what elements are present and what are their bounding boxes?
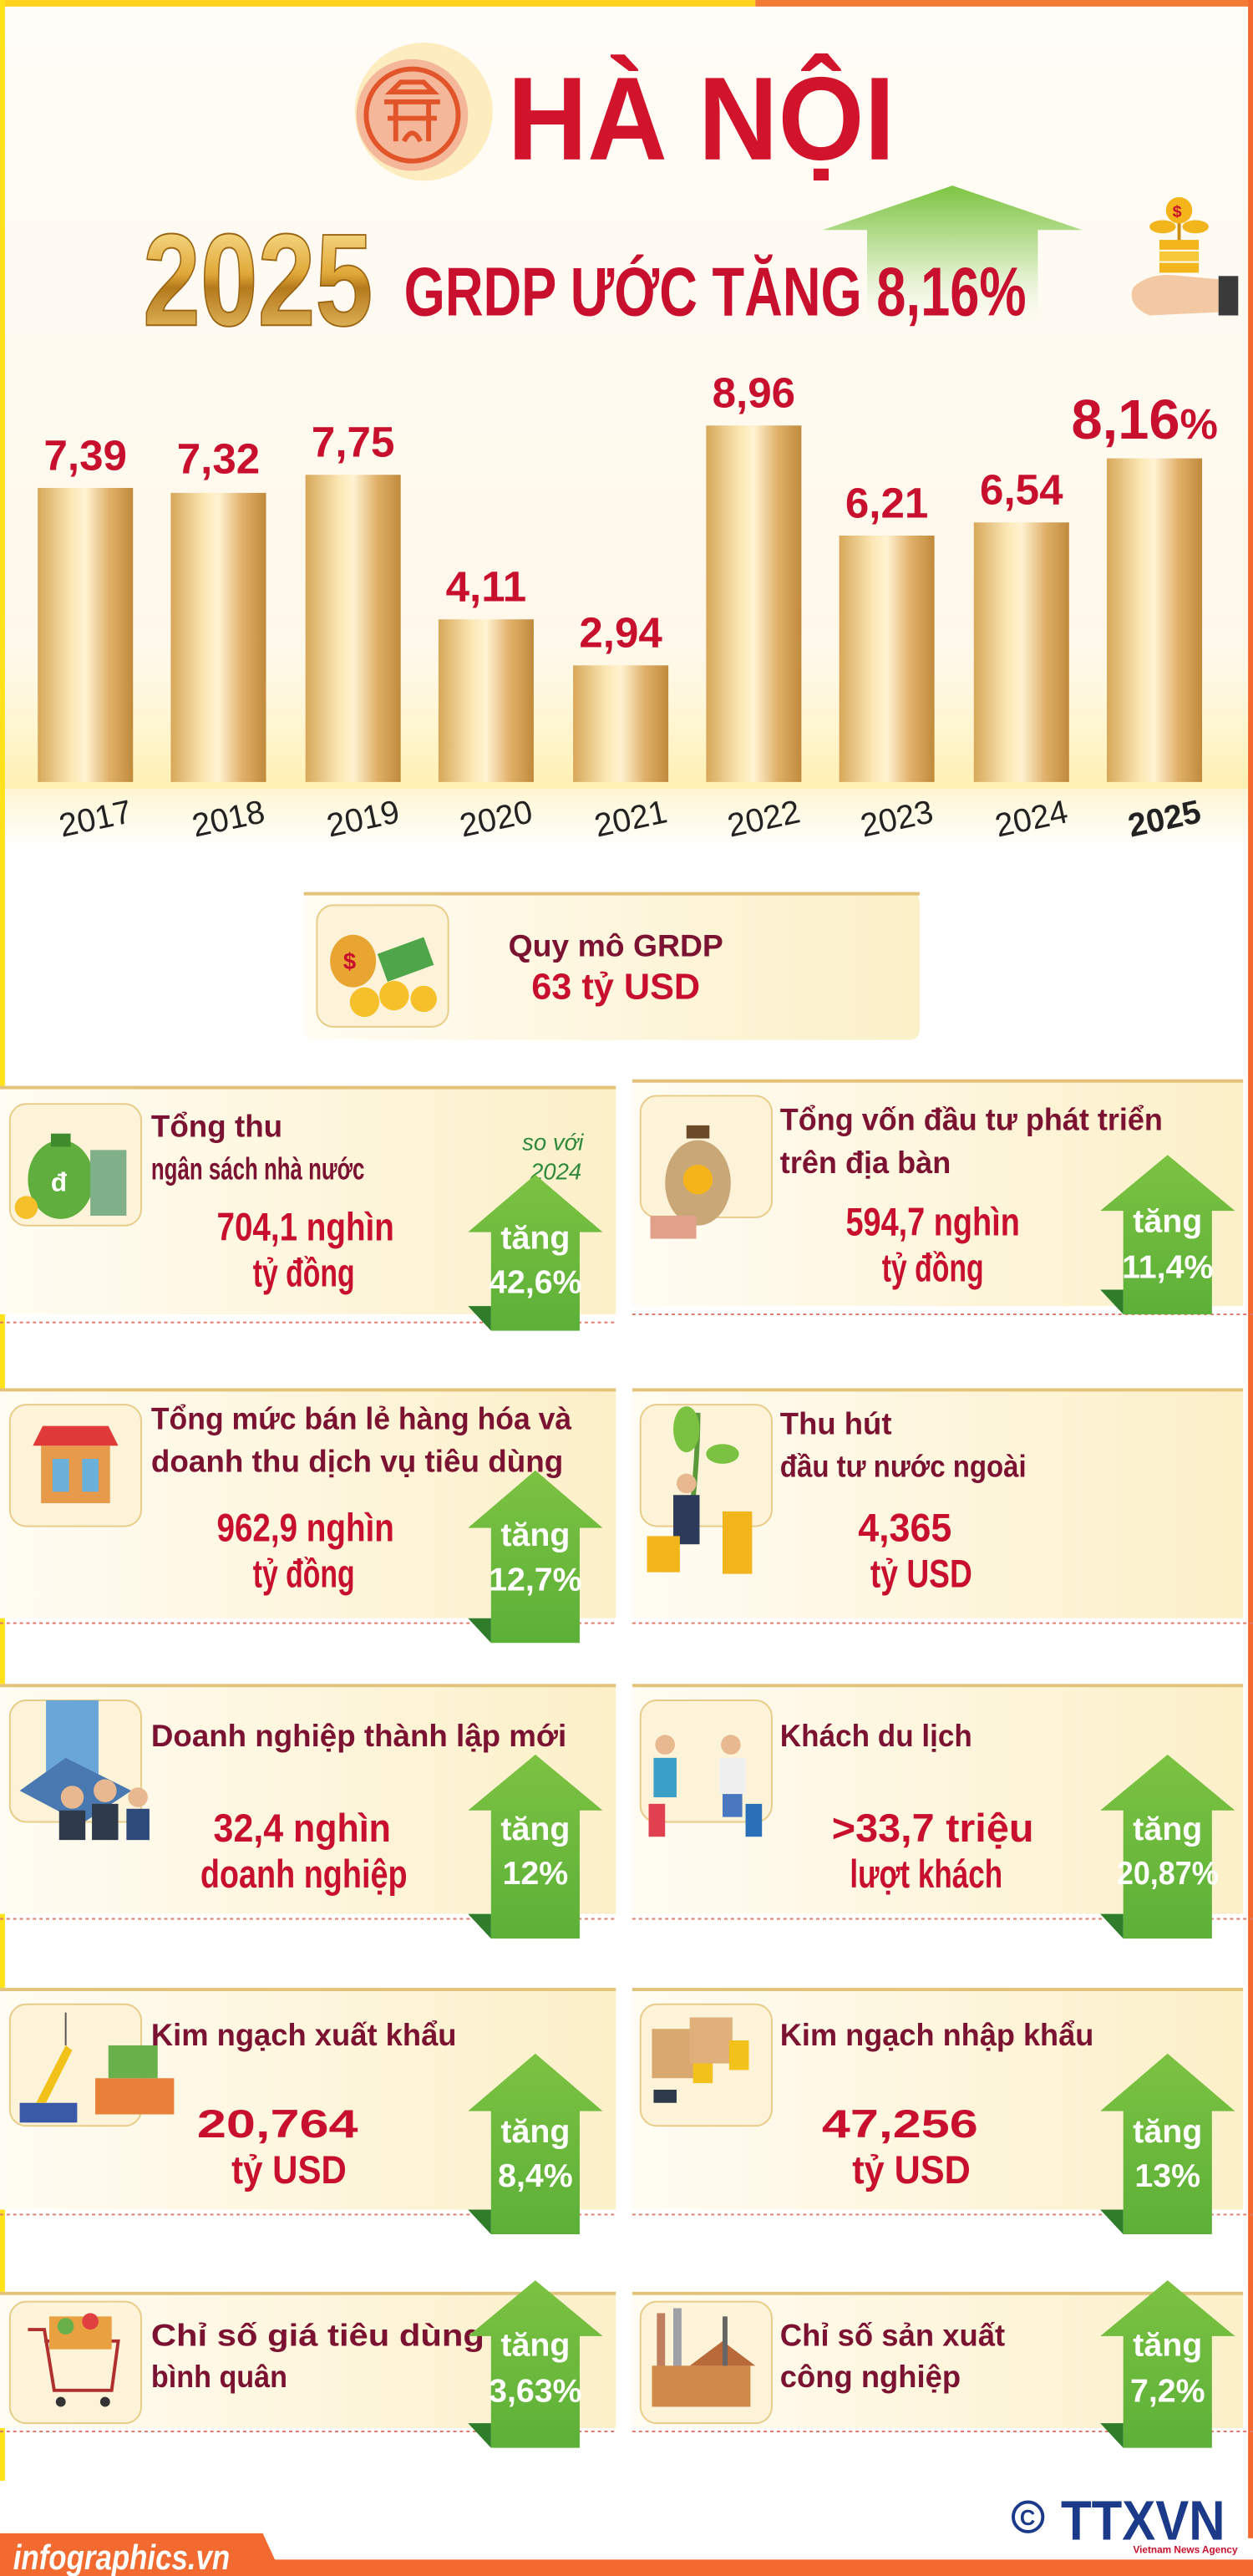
arrow: tăng 3,63% (468, 2280, 602, 2448)
bar chart: 2,94 (579, 609, 662, 657)
note: so với 2024: so với (522, 1129, 584, 1155)
panel: Quy mô GRDP: $ (343, 948, 356, 974)
panel: Tổng thu ngân sách: 704,1 nghìn (217, 1204, 394, 1248)
arrow: tăng 11,4% (1100, 1155, 1235, 1314)
panel: Quy mô GRDP (304, 892, 920, 1040)
arrow: tăng 12,7% (468, 1471, 602, 1643)
bar chart: 7,32 (177, 434, 260, 482)
bar chart: 2018 (189, 793, 268, 845)
arrow: tăng 8,4% (468, 2054, 602, 2234)
icon: crane and containers (10, 2004, 174, 2126)
bar chart: 2025 (1125, 793, 1204, 845)
arrow: tăng 3,63%: tăng (500, 2327, 570, 2364)
top bar (0, 0, 1253, 7)
arrow: tăng 12%: 12% (503, 1855, 568, 1892)
arrow: tăng 7,2%: tăng (1133, 2327, 1202, 2364)
bar chart: 7,75 (312, 419, 394, 466)
bar chart: 6,54 (980, 466, 1063, 514)
arrow: tăng 12,7%: 12,7% (489, 1561, 582, 1598)
panel: Tổng thu ngân sách: Tổng thu (151, 1109, 282, 1144)
panel: Thu hút đầu tư nước ngoài: Thu hút (780, 1405, 891, 1440)
footer bar (0, 2533, 1253, 2576)
panel: Thu hút đầu tư nước ngoài: 4,365 (858, 1505, 951, 1549)
subtitle: GRDP ƯỚC TĂNG 8,16%: GRDP ƯỚC TĂNG 8,16% (404, 254, 1027, 331)
panel: Tổng vốn đầu tư: trên địa bàn (780, 1145, 951, 1180)
arrow: tăng 12%: tăng (500, 1811, 570, 1847)
arrow: tăng 20,87% (1100, 1755, 1235, 1938)
panel: Tổng vốn đầu tư: tỷ đồng (882, 1246, 984, 1290)
panel: Chỉ số giá tiêu dùng (0, 2292, 616, 2431)
bar chart: 7,39 (43, 431, 127, 479)
arrow: tăng 8,4%: tăng (500, 2113, 570, 2150)
panel: Tổng thu ngân sách: ngân sách nhà nước (151, 1151, 364, 1186)
note: so với 2024 (522, 1129, 584, 1185)
arrow: tăng 7,2% (1100, 2280, 1235, 2448)
panel: Kim ngạch xuất khẩu: 20,764 (197, 2101, 358, 2146)
bar chart: 8,16% (1071, 389, 1218, 451)
panel: Khách du lịch: lượt khách (850, 1852, 1002, 1896)
panel: Doanh nghiệp thành lập mới (0, 1684, 616, 1919)
right orange border (1248, 0, 1253, 2538)
panel: Doanh nghiệp thành lập mới: Doanh nghiệp thành lập mới (151, 1718, 566, 1753)
icon: factory (641, 2302, 772, 2423)
panel: Kim ngạch nhập khẩu (632, 1988, 1253, 2214)
bar chart: 2023 (857, 793, 936, 845)
arrow: tăng 13%: tăng (1133, 2113, 1202, 2150)
icon: sack (641, 1095, 772, 1239)
bar chart: 2021 (591, 793, 670, 845)
logo: TTXVN: TTXVN (1061, 2490, 1225, 2553)
panel: Doanh nghiệp thành lập mới: doanh nghiệp (200, 1852, 408, 1896)
panel: Tổng vốn đầu tư (632, 1080, 1253, 1314)
note: so với 2024: 2024 (530, 1159, 581, 1185)
arrow: tăng 42,6% (468, 1175, 602, 1331)
arrow: tăng 20,87%: 20,87% (1117, 1855, 1219, 1892)
bar chart (38, 369, 1218, 845)
panel: Kim ngạch nhập khẩu: tỷ USD (852, 2147, 971, 2192)
left yellow border (0, 0, 5, 2481)
title: HÀ NỘI: HÀ NỘI (507, 53, 895, 185)
arrow: tăng 42,6%: 42,6% (489, 1263, 582, 1300)
panel: Thu hút đầu tư nước ngoài: tỷ USD (870, 1551, 972, 1595)
icon: money plant in hand (1132, 197, 1238, 316)
panel: Kim ngạch nhập khẩu: 47,256 (822, 2101, 978, 2146)
panel: Tổng vốn đầu tư: Tổng vốn đầu tư phát triển (780, 1102, 1163, 1137)
panel: Quy mô GRDP: Quy mô GRDP (509, 927, 723, 963)
arrow: tăng 3,63%: 3,63% (489, 2373, 582, 2410)
logo: TTXVN: C (1020, 2507, 1035, 2530)
logo: TTXVN: Vietnam News Agency (1133, 2544, 1238, 2555)
bar chart: 2024 (992, 793, 1071, 845)
panel: Chỉ số sản xuất công nghiệp: công nghiệp (780, 2359, 961, 2394)
panel: Tổng thu ngân sách: tỷ đồng (253, 1251, 355, 1295)
icon: money bag (10, 1104, 141, 1226)
icon: business building (10, 1700, 150, 1840)
panel: Tổng mức bán lẻ: 962,9 nghìn (217, 1505, 394, 1549)
arrow: tăng 20,87%: tăng (1133, 1811, 1202, 1847)
bar chart: 2020 (457, 793, 535, 845)
icon: money plant in hand: $ (1173, 203, 1182, 221)
panel: Khách du lịch (632, 1684, 1253, 1919)
panel: Kim ngạch nhập khẩu: Kim ngạch nhập khẩu (780, 2017, 1093, 2052)
footer bar: infographics.vn (13, 2538, 230, 2576)
arrow: tăng 11,4%: 11,4% (1122, 1249, 1213, 1286)
arrow: tăng 12,7%: tăng (500, 1517, 570, 1553)
bar chart: 2017 (56, 793, 135, 845)
panel: Quy mô GRDP: 63 tỷ USD (531, 967, 700, 1007)
panel: Chỉ số sản xuất công nghiệp (632, 2292, 1253, 2431)
panel: Kim ngạch xuất khẩu: tỷ USD (231, 2147, 347, 2192)
bar chart: 4,11 (446, 563, 526, 611)
panel: Doanh nghiệp thành lập mới: 32,4 nghìn (214, 1806, 391, 1850)
panel: Kim ngạch xuất khẩu (0, 1988, 616, 2214)
big green arrow (823, 185, 1083, 337)
icon: investor with plant (641, 1405, 772, 1574)
arrow: tăng 42,6%: tăng (500, 1219, 570, 1256)
icon: shopping cart (10, 2302, 141, 2423)
bar chart: 2019 (323, 793, 403, 845)
icon: trucks (641, 2004, 772, 2126)
arrow: tăng 7,2%: 7,2% (1130, 2373, 1205, 2410)
arrow: tăng 13% (1100, 2054, 1235, 2234)
panel: Khách du lịch: >33,7 triệu (832, 1806, 1034, 1850)
panel: Tổng vốn đầu tư: 594,7 nghìn (845, 1200, 1020, 1244)
panel: Tổng mức bán lẻ: tỷ đồng (253, 1551, 355, 1595)
arrow: tăng 13%: 13% (1134, 2157, 1200, 2194)
arrow: tăng 8,4%: 8,4% (498, 2157, 573, 2194)
panel: Chỉ số giá tiêu dùng: Chỉ số giá tiêu dùng (151, 2318, 484, 2353)
panel: Tổng mức bán lẻ (0, 1388, 616, 1623)
bar chart: 8,96 (713, 369, 795, 417)
icon: money bag: đ (51, 1167, 68, 1197)
panel: Thu hút đầu tư nước ngoài: đầu tư nước ngoài (780, 1449, 1027, 1484)
panel: Chỉ số sản xuất công nghiệp: Chỉ số sản xuất (780, 2318, 1005, 2353)
bar chart: 2022 (724, 793, 804, 845)
panel: Thu hút đầu tư nước ngoài (632, 1388, 1253, 1623)
arrow: tăng 12% (468, 1755, 602, 1938)
bar chart: 6,21 (845, 479, 928, 526)
arrow: tăng 11,4%: tăng (1133, 1203, 1202, 1240)
title: 2025 gold: 2025 (143, 207, 373, 353)
panel: Kim ngạch xuất khẩu: Kim ngạch xuất khẩu (151, 2017, 457, 2052)
panel: Tổng thu ngân sách (0, 1086, 616, 1323)
icon: store (10, 1405, 141, 1527)
panel: Khách du lịch: Khách du lịch (780, 1718, 972, 1753)
icon: tourists (641, 1700, 772, 1837)
logo: Hanoi emblem (355, 43, 493, 180)
panel: Tổng mức bán lẻ: Tổng mức bán lẻ hàng hóa và (151, 1401, 571, 1436)
panel: Chỉ số giá tiêu dùng: bình quân (151, 2359, 287, 2394)
panel: Tổng mức bán lẻ: doanh thu dịch vụ tiêu dùng (151, 1444, 563, 1479)
